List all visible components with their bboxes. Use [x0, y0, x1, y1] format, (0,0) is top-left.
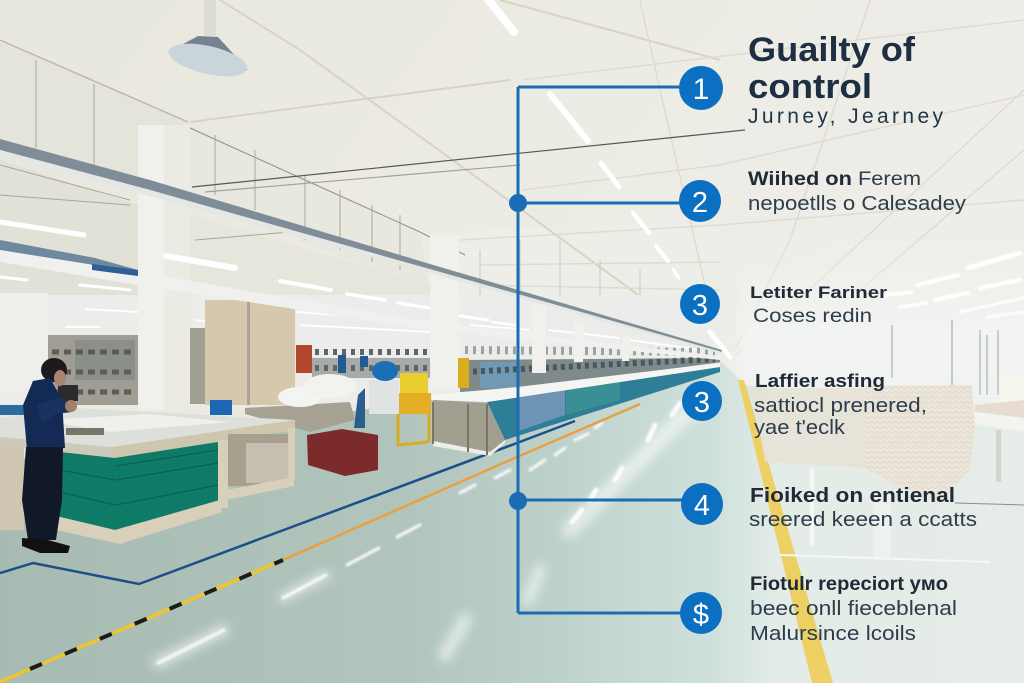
ceiling [0, 0, 1024, 400]
step text 5: Malursince lcoils [750, 623, 916, 645]
title: Jurney, Jearney [748, 105, 944, 128]
step text 1: nepoetlls o Calesadey [748, 193, 966, 215]
step text 3: yae t'eclk [754, 417, 846, 439]
fabric bale right [752, 385, 975, 502]
step text 3 [754, 371, 927, 439]
title: Guailty of [748, 31, 916, 69]
step badge 4 [681, 483, 723, 525]
step text 2 [750, 283, 887, 327]
step text 1: Wiihed on Ferem [748, 169, 921, 190]
step text 5 [750, 574, 957, 645]
title [748, 31, 944, 128]
tan partition [205, 300, 295, 405]
right table [955, 400, 1024, 505]
step badge dollar: $ [693, 599, 709, 631]
floor panel edge and soft column [780, 495, 990, 562]
step text 5: beec onll fieceblenal [750, 598, 957, 620]
title: control [748, 68, 872, 106]
pillars [138, 125, 629, 410]
ceiling lamp [166, 0, 250, 83]
patterned cube [307, 429, 378, 476]
white bags on bench [245, 374, 356, 432]
step badge 3: 3 [692, 290, 708, 322]
timeline connector [509, 87, 702, 613]
floor [0, 362, 1024, 683]
step badge 2 [679, 180, 721, 222]
machinery clutter [52, 350, 715, 392]
worker [22, 358, 78, 553]
back hall left [0, 293, 720, 415]
step badge 1: 1 [693, 73, 709, 106]
step text 2: Coses redin [753, 306, 872, 327]
ventilation duct [0, 139, 722, 360]
blue box [210, 400, 232, 415]
step badge 3 second [682, 381, 722, 421]
step text 3: sattiocl prenered, [754, 395, 927, 417]
right hazy wall [738, 230, 1024, 420]
step badge 2: 2 [692, 187, 708, 219]
step text 4: sreered keeen a ccatts [749, 509, 977, 531]
yellow floor line [738, 380, 833, 683]
ceiling light strips [0, 0, 730, 357]
floor reflections [158, 395, 812, 663]
long work tables [432, 363, 720, 456]
step badge 3 second: 3 [694, 387, 710, 419]
step text 2: Letiter Fariner [750, 283, 887, 302]
step text 3: Laffier asfing [755, 371, 885, 391]
step badge 1 [679, 66, 723, 110]
step text 4: Fioiked on entienal [750, 485, 955, 507]
step text 4 [749, 485, 977, 531]
blue machine with cover [338, 355, 399, 428]
step badge dollar [680, 592, 722, 634]
step badge 3 [680, 284, 720, 324]
cutting table [0, 408, 295, 544]
blue floor line [0, 421, 575, 584]
step text 1 [748, 169, 966, 215]
yellow stand [397, 358, 469, 445]
step badge 4: 4 [694, 490, 710, 522]
safety tape [0, 404, 640, 682]
step text 5: Fiotulr repeciort yмo [750, 574, 948, 595]
